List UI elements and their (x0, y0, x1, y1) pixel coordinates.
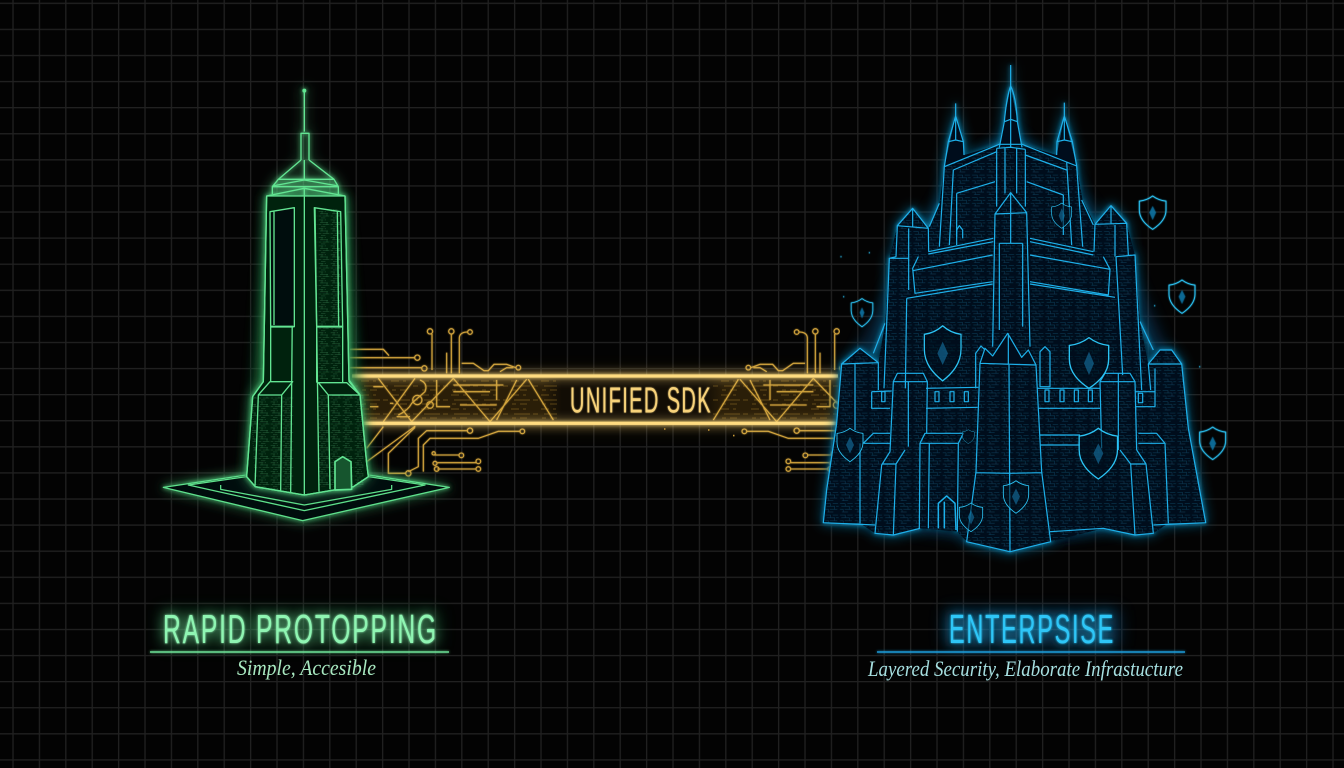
floating shield 3 (851, 299, 873, 327)
battlement slots (882, 390, 1143, 403)
connector label: UNIFIED SDK (570, 380, 712, 421)
gate tower texture (967, 363, 1051, 552)
circuit traces right (712, 327, 840, 473)
heading: ENTERPSISE (949, 606, 1115, 652)
front right tower (1050, 373, 1153, 535)
shield 8 (962, 430, 974, 444)
keep upper block (939, 144, 1083, 247)
floating shields (841, 196, 1226, 460)
left shoulder (255, 382, 293, 491)
floating shield emblems (860, 206, 1216, 451)
shield 4 (1052, 203, 1072, 228)
circuit traces left (350, 329, 553, 476)
front left tower (875, 373, 927, 535)
shield 6 (1003, 481, 1029, 513)
antenna and roof (267, 91, 345, 196)
shields on fortress (837, 203, 1117, 532)
illustration: green tower (163, 89, 449, 521)
right shoulder (318, 383, 360, 489)
heading rule (877, 651, 1185, 653)
floating shield 1 (1139, 196, 1166, 229)
subtitle: Simple, Accesible (237, 655, 376, 680)
sparks (664, 429, 734, 436)
floating shield 4 (1200, 427, 1226, 460)
tower base plate (163, 475, 449, 521)
spires (999, 65, 1022, 147)
arched windows (957, 226, 1050, 388)
shield 5 (837, 428, 863, 462)
connector: unified SDK bridge (350, 327, 840, 478)
tower door (335, 457, 352, 490)
connector band fill (352, 377, 840, 423)
antenna tip (303, 89, 306, 92)
shield emblems (846, 208, 1103, 525)
connector glow (360, 370, 840, 430)
far left tower (823, 348, 890, 525)
shield 7 (959, 503, 983, 532)
right tower (1094, 206, 1142, 390)
top rail (352, 374, 838, 378)
far right tower (1138, 350, 1206, 525)
left window (270, 208, 294, 327)
central gate tower (967, 333, 1051, 552)
illustration: blue fortress (823, 65, 1226, 552)
caption glow (160, 610, 440, 646)
shield 2 (1069, 338, 1109, 388)
gate door (938, 496, 956, 530)
shield 1 (924, 326, 961, 381)
heading: RAPID PROTOPPING (163, 606, 438, 652)
tower outline and center lines (247, 188, 368, 495)
fortress body (823, 65, 1206, 552)
blue sparks (841, 253, 1200, 367)
mid ledge right (1030, 238, 1115, 297)
floating shield 2 (1169, 280, 1195, 313)
fortress wall texture (823, 144, 1206, 552)
caption: rapid prototyping (150, 606, 449, 680)
fortress glow (830, 127, 1200, 547)
tower circuit texture (250, 208, 363, 490)
mid ledge left (907, 238, 993, 298)
tower silhouette (247, 196, 368, 495)
gate house (919, 433, 1080, 532)
left tower (884, 208, 929, 388)
bottom rail (352, 422, 838, 425)
central front pillar (993, 193, 1030, 347)
band texture right (712, 378, 840, 422)
caption: enterprise (867, 606, 1185, 681)
heading rule (150, 651, 449, 653)
guy lines (873, 200, 1153, 353)
right window (314, 208, 343, 327)
caption glow (945, 610, 1120, 646)
shield 3 (1079, 428, 1117, 479)
gate tower center line (1009, 365, 1010, 552)
band texture left (352, 378, 557, 422)
tower glow (247, 196, 367, 477)
tower body (247, 89, 368, 495)
fortress silhouette (823, 86, 1206, 552)
battlements (872, 387, 1155, 408)
subtitle: Layered Security, Elaborate Infrastucture (867, 656, 1183, 681)
